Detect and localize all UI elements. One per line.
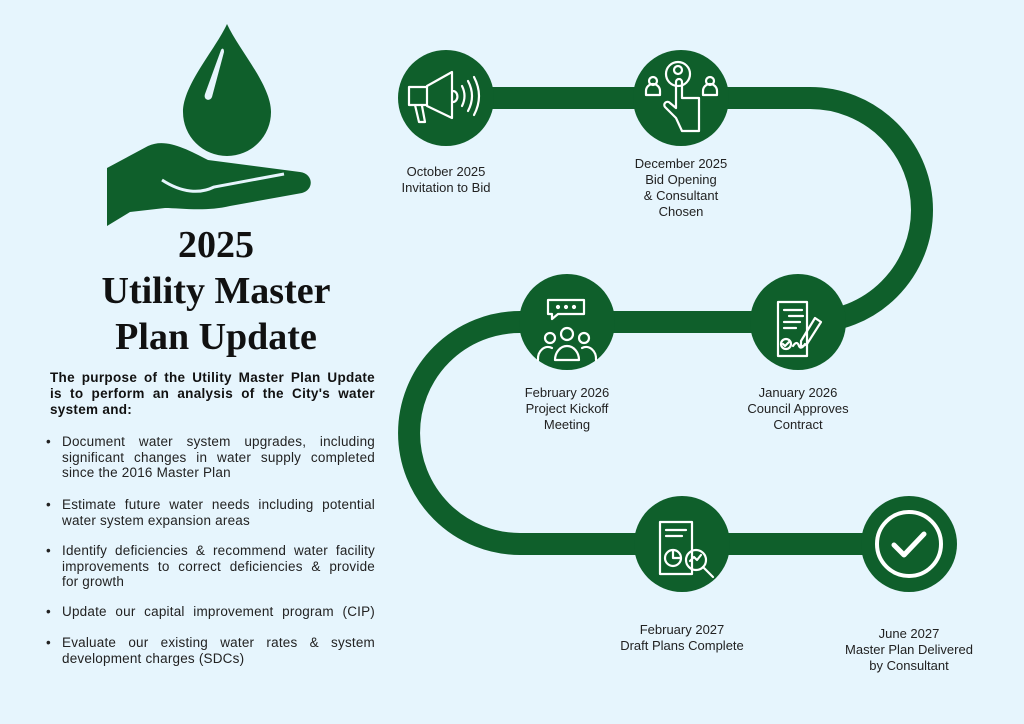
label: February 2026: February 2026 xyxy=(525,385,609,400)
bullet 1 xyxy=(46,434,375,480)
label: January 2026: Council Approves xyxy=(747,401,849,416)
title: Utility Master xyxy=(102,270,330,312)
label: January 2026: January 2026 xyxy=(759,385,837,400)
label: June 2027: by Consultant xyxy=(869,658,949,673)
bullet 5: • xyxy=(46,635,51,650)
icon: contract xyxy=(750,274,846,370)
title: Plan Update xyxy=(115,316,317,358)
bullet 1: Document water system upgrades, including xyxy=(62,434,375,449)
bullet 1: • xyxy=(46,434,51,449)
label: October 2025 xyxy=(402,164,490,195)
icon: report xyxy=(634,496,730,592)
intro text: system and: xyxy=(50,402,132,417)
icon: people selection xyxy=(633,50,729,146)
label: February 2027: Draft Plans Complete xyxy=(620,638,744,653)
bullet 3 xyxy=(46,543,375,589)
label: January 2026: Contract xyxy=(773,417,823,432)
bullet 2: • xyxy=(46,497,51,512)
bullet 2: water system expansion areas xyxy=(62,512,250,528)
bullet 3: • xyxy=(46,543,51,558)
intro text xyxy=(50,370,375,417)
label: October 2025: Invitation to Bid xyxy=(402,180,490,195)
label: December 2025: Chosen xyxy=(659,204,703,219)
label: December 2025: Bid Opening xyxy=(645,172,717,187)
icon: hand with water drop xyxy=(107,24,311,226)
intro text: is to perform an analysis of the City's water xyxy=(50,386,375,401)
label: February 2027: February 2027 xyxy=(640,622,724,637)
bullet 2 xyxy=(46,497,375,528)
icon: meeting xyxy=(519,274,615,370)
bullet 5: development charges (SDCs) xyxy=(62,650,244,666)
bullet 3: Identify deficiencies & recommend water facility xyxy=(62,543,375,558)
label: December 2025 xyxy=(635,156,727,219)
intro text: The purpose of the Utility Master Plan Update xyxy=(50,370,375,385)
bullet 3: for growth xyxy=(62,574,124,589)
icon: megaphone xyxy=(398,50,494,146)
bullet 1: significant changes in water supply completed xyxy=(62,450,375,464)
label: February 2027 xyxy=(620,622,744,653)
label: January 2026 xyxy=(747,385,849,432)
title: 2025 xyxy=(178,224,254,266)
icon: checkmark xyxy=(861,496,957,592)
label: October 2025: October 2025 xyxy=(407,164,485,179)
label: June 2027 xyxy=(845,626,973,673)
label: December 2025: December 2025 xyxy=(635,156,727,171)
label: June 2027: June 2027 xyxy=(879,626,939,641)
bullet 4: Update our capital improvement program (CIP) xyxy=(62,604,375,619)
label: June 2027: Master Plan Delivered xyxy=(845,642,973,657)
title xyxy=(102,224,330,358)
bullet 3: improvements to correct deficiencies & provide xyxy=(62,558,375,574)
label: December 2025: & Consultant xyxy=(644,188,718,203)
label: February 2026: Project Kickoff xyxy=(526,401,608,416)
bullet 4: • xyxy=(46,604,51,619)
label: February 2026: Meeting xyxy=(544,417,590,432)
label: February 2026 xyxy=(525,385,609,432)
bullet 5: Evaluate our existing water rates & system xyxy=(62,635,375,650)
bullet 2: Estimate future water needs including potential xyxy=(62,497,375,512)
bullet 1: since the 2016 Master Plan xyxy=(62,465,231,480)
bullet 5 xyxy=(46,635,375,666)
